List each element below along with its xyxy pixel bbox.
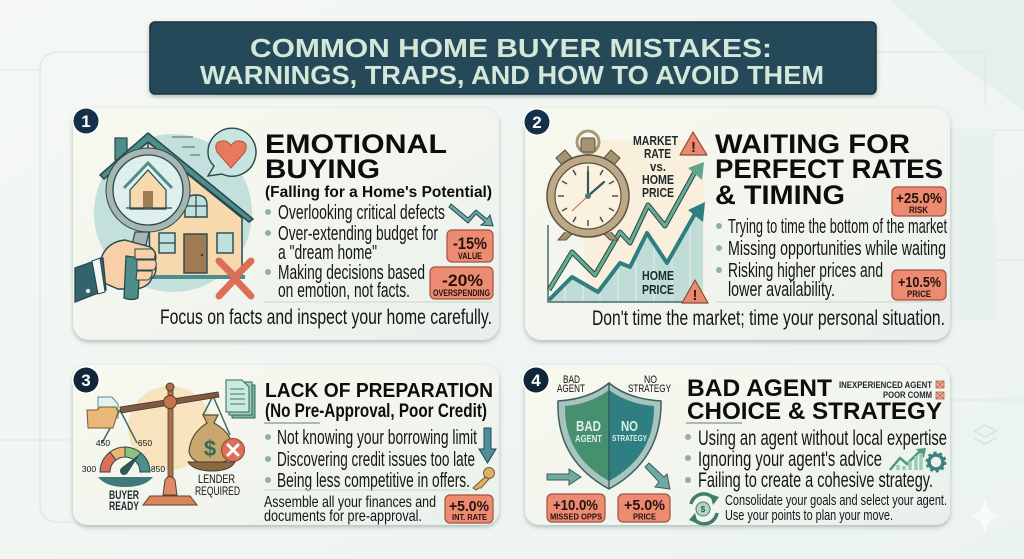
heading: emotional buying: BUYING xyxy=(265,154,380,184)
bullet list: Overlooking critical defects xyxy=(278,201,445,224)
icon: falling trend arrow xyxy=(449,204,493,226)
label: bad agent xyxy=(557,374,585,395)
arrow: diagonal down xyxy=(645,463,670,489)
icon: shield: BAD xyxy=(576,418,601,435)
label: buyer ready xyxy=(109,488,139,513)
bullet list xyxy=(716,215,947,301)
stat: -15% value: -15% xyxy=(453,234,487,253)
heading: lack of preparation: LACK OF PREPARATION xyxy=(265,380,493,402)
takeaway: Use your points to plan your move. xyxy=(725,508,893,524)
stat: +5% interest rate: +5.0% xyxy=(449,498,489,515)
chart: market rate vs home price xyxy=(548,140,705,302)
number badge 4 xyxy=(522,366,550,394)
heading: emotional buying xyxy=(265,129,447,184)
takeaway: documents for pre-approval. xyxy=(264,508,422,525)
number badge 4: 4 xyxy=(531,371,541,390)
stat: +10.5% price: +10.5% xyxy=(898,274,941,291)
icon: warning bottom: ! xyxy=(692,287,698,304)
takeaway xyxy=(725,493,947,524)
icon: growth chart xyxy=(890,448,926,470)
chart label: market rate vs home price: HOME xyxy=(642,172,674,187)
panel 4: bad agent choice xyxy=(522,365,950,525)
warning tags: POOR COMM xyxy=(883,390,932,401)
arrow: right xyxy=(547,469,581,485)
number badge 1: 1 xyxy=(81,112,91,131)
illustration: balance scale xyxy=(102,383,244,505)
stat: +10.5% price: PRICE xyxy=(907,289,931,299)
heading: bad agent choice & strategy xyxy=(687,375,942,425)
icon: down arrow xyxy=(479,428,496,463)
number badge 3 xyxy=(72,366,100,394)
heading: waiting for perfect rates & timing xyxy=(715,129,943,210)
stat: +5% interest rate: INT. RATE xyxy=(452,513,488,522)
label: bad agent: BAD xyxy=(563,374,580,386)
red X xyxy=(219,261,251,296)
heading: bad agent choice & strategy: CHOICE & STRATEGY xyxy=(687,398,942,425)
gauge: credit score xyxy=(82,438,165,487)
bullet list: Over-extending budget for xyxy=(278,222,438,245)
stat: +5% price: PRICE xyxy=(633,512,656,522)
stat: -15% value: VALUE xyxy=(458,251,482,261)
icon: warning top xyxy=(680,132,707,156)
icon: shield: AGENT xyxy=(575,434,602,445)
icon: cycle arrows: $ xyxy=(701,505,706,514)
heading: bad agent choice & strategy: BAD AGENT xyxy=(687,375,832,402)
gauge: credit score: 300 xyxy=(82,464,96,474)
bullet list: on emotion, not facts. xyxy=(278,279,410,302)
illustration: balance scale: $ xyxy=(204,436,216,461)
title line 2: WARNINGS, TRAPS, AND HOW TO AVOID THEM xyxy=(200,60,824,90)
gauge: credit score: 450 xyxy=(96,438,110,448)
stat: +5% price xyxy=(618,494,670,522)
takeaway: Focus on facts and inspect your home carefully. xyxy=(160,305,492,329)
magnifier xyxy=(106,148,190,232)
stat: +25% risk: +25.0% xyxy=(896,190,942,207)
chart label: market rate vs home price: MARKET xyxy=(633,133,678,148)
icon: warning top: ! xyxy=(691,139,696,156)
bullet list: Being less competitive in offers. xyxy=(277,469,470,492)
label: buyer ready: BUYER xyxy=(109,488,139,502)
stat: +25% risk xyxy=(892,187,946,216)
stat: +10% missed opps xyxy=(547,494,605,522)
heading: waiting for perfect rates & timing: & TIMING xyxy=(715,180,845,210)
title line 1: COMMON HOME BUYER MISTAKES: xyxy=(250,33,772,63)
icon: stacked layers mark xyxy=(974,425,996,444)
heading: waiting for perfect rates & timing: PERFECT RATES xyxy=(715,154,943,184)
icon: shield xyxy=(558,383,661,489)
label: bad agent: AGENT xyxy=(557,383,585,395)
takeaway xyxy=(264,494,436,525)
money bag xyxy=(189,415,233,464)
warning tags xyxy=(839,380,944,401)
bullet list: Ignoring your agent's advice xyxy=(698,448,882,471)
icon: shield: STRATEGY xyxy=(612,433,647,443)
chart label: home price: HOME xyxy=(642,268,674,283)
label: lender required: REQUIRED xyxy=(195,484,240,498)
stat: +25% risk: RISK xyxy=(909,205,928,215)
bullet list: lower availability. xyxy=(728,278,835,301)
icon: heart speech bubble xyxy=(208,128,256,176)
heading: waiting for perfect rates & timing: WAITING FOR xyxy=(715,129,910,159)
gauge: credit score: 650 xyxy=(138,438,152,448)
icon: folder xyxy=(87,397,118,428)
stat: +5% interest rate xyxy=(445,495,493,523)
icon: stopwatch xyxy=(547,131,629,240)
number badge 1 xyxy=(72,107,100,135)
label: lender required: LENDER xyxy=(198,472,235,486)
bullet list xyxy=(265,201,445,302)
bullet list: Not knowing your borrowing limit xyxy=(277,426,477,449)
stat: +10.5% price xyxy=(892,270,946,300)
heading: emotional buying: EMOTIONAL xyxy=(265,129,447,159)
stat: -20% overspending xyxy=(430,267,493,299)
gauge: credit score: 850 xyxy=(151,464,165,474)
chart label: home price: PRICE xyxy=(642,282,674,297)
takeaway: Consolidate your goals and select your agent. xyxy=(725,493,947,509)
bullet list: Risking higher prices and xyxy=(728,259,883,282)
chart label: market rate vs home price: vs. xyxy=(650,159,666,174)
label: buyer ready: READY xyxy=(109,499,139,513)
number badge 3: 3 xyxy=(81,371,91,390)
takeaway: Assemble all your finances and xyxy=(264,494,436,511)
icon: warning bottom xyxy=(682,280,708,304)
label: no strategy xyxy=(628,374,671,395)
bullet list xyxy=(265,426,477,492)
icon: documents xyxy=(226,380,255,418)
icon: sparkle mark xyxy=(970,498,1000,534)
icon: cycle arrows xyxy=(689,494,719,524)
chart label: market rate vs home price xyxy=(633,133,678,200)
label: lender required xyxy=(195,472,240,498)
stat: -15% value xyxy=(447,230,493,262)
chart label: market rate vs home price: PRICE xyxy=(642,185,674,200)
warning tags: INEXPERIENCED AGENT xyxy=(839,380,932,391)
panel 3: lack of preparation xyxy=(72,365,499,525)
bullet list: a "dream home" xyxy=(278,241,377,264)
bullet list: Discovering credit issues too late xyxy=(277,448,475,471)
subheading: (Falling for a Home's Potential) xyxy=(265,184,492,201)
icon: gear xyxy=(926,452,946,472)
number badge 2: 2 xyxy=(532,113,542,132)
number badge 2 xyxy=(523,108,551,136)
bullet list: Making decisions based xyxy=(278,261,425,284)
panel 2: waiting for perfect rates xyxy=(523,108,950,340)
chart label: home price xyxy=(642,268,674,297)
stat: -20% overspending: -20% xyxy=(442,271,483,290)
subheading: (No Pre-Approval, Poor Credit) xyxy=(265,401,487,422)
label: no strategy: STRATEGY xyxy=(628,383,671,395)
panel 1: emotional buying xyxy=(72,107,499,340)
icon: shield: NO xyxy=(621,418,638,435)
stat: +5% price: +5.0% xyxy=(624,497,665,514)
bullet list xyxy=(685,427,947,492)
title banner xyxy=(150,22,876,94)
stat: -20% overspending: OVERSPENDING xyxy=(433,288,490,298)
stat: +10% missed opps: +10.0% xyxy=(553,497,598,514)
label: no strategy: NO xyxy=(644,374,657,386)
stat: +10% missed opps: MISSED OPPS xyxy=(550,512,602,522)
icon: key xyxy=(473,468,494,490)
illustration: house under magnifying glass xyxy=(75,133,253,302)
chart label: market rate vs home price: RATE xyxy=(644,146,671,161)
